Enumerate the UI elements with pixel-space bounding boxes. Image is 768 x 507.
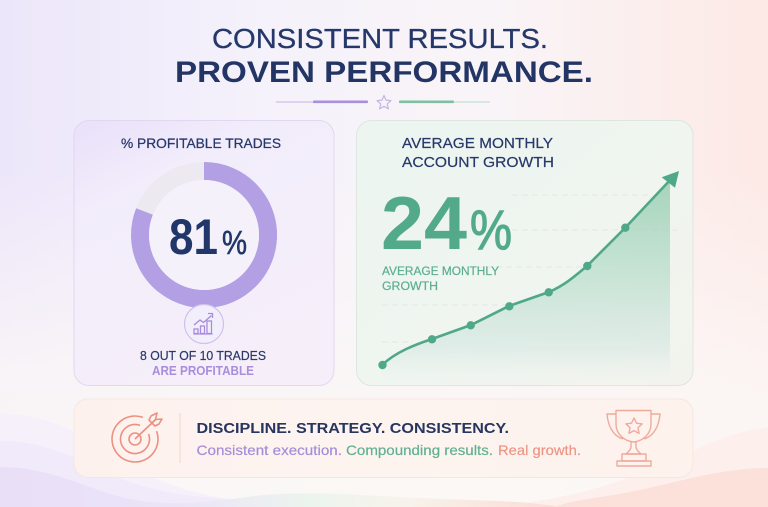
value: 24%: 24	[381, 181, 467, 265]
value: 24%: %	[470, 198, 512, 261]
panel: account growth	[356, 120, 693, 386]
value: 24%	[381, 181, 512, 265]
panel: profitable trades	[74, 120, 334, 386]
value: 81%: %	[222, 224, 247, 261]
banner tagline: Compounding results.	[346, 442, 493, 458]
panel heading: AVERAGE MONTHLY	[402, 136, 553, 152]
icon: rising bar chart	[184, 304, 224, 344]
caption: ARE PROFITABLE	[152, 364, 254, 378]
icon: trophy	[607, 410, 660, 466]
banner tagline	[196, 442, 581, 458]
panel heading: ACCOUNT GROWTH	[402, 155, 554, 171]
panel heading: % PROFITABLE TRADES	[121, 135, 281, 151]
title	[175, 23, 593, 89]
caption: 8 OUT OF 10 TRADES	[140, 349, 266, 363]
caption	[382, 266, 499, 293]
donut chart: 81 percent	[140, 171, 268, 299]
value: 81%: 81	[169, 209, 218, 265]
area chart: growth curve	[378, 171, 679, 385]
caption: AVERAGE MONTHLY	[382, 266, 499, 278]
icon: target with arrow	[112, 413, 162, 462]
title divider with star	[276, 96, 490, 109]
banner tagline: Real growth.	[498, 442, 581, 458]
caption: GROWTH	[382, 281, 438, 293]
title: PROVEN PERFORMANCE.	[175, 56, 593, 89]
panel heading	[402, 136, 554, 171]
panel: discipline banner	[74, 399, 693, 478]
caption	[140, 349, 266, 378]
banner heading: DISCIPLINE. STRATEGY. CONSISTENCY.	[196, 420, 509, 437]
title: CONSISTENT RESULTS.	[212, 23, 548, 54]
banner tagline: Consistent execution.	[196, 442, 342, 458]
